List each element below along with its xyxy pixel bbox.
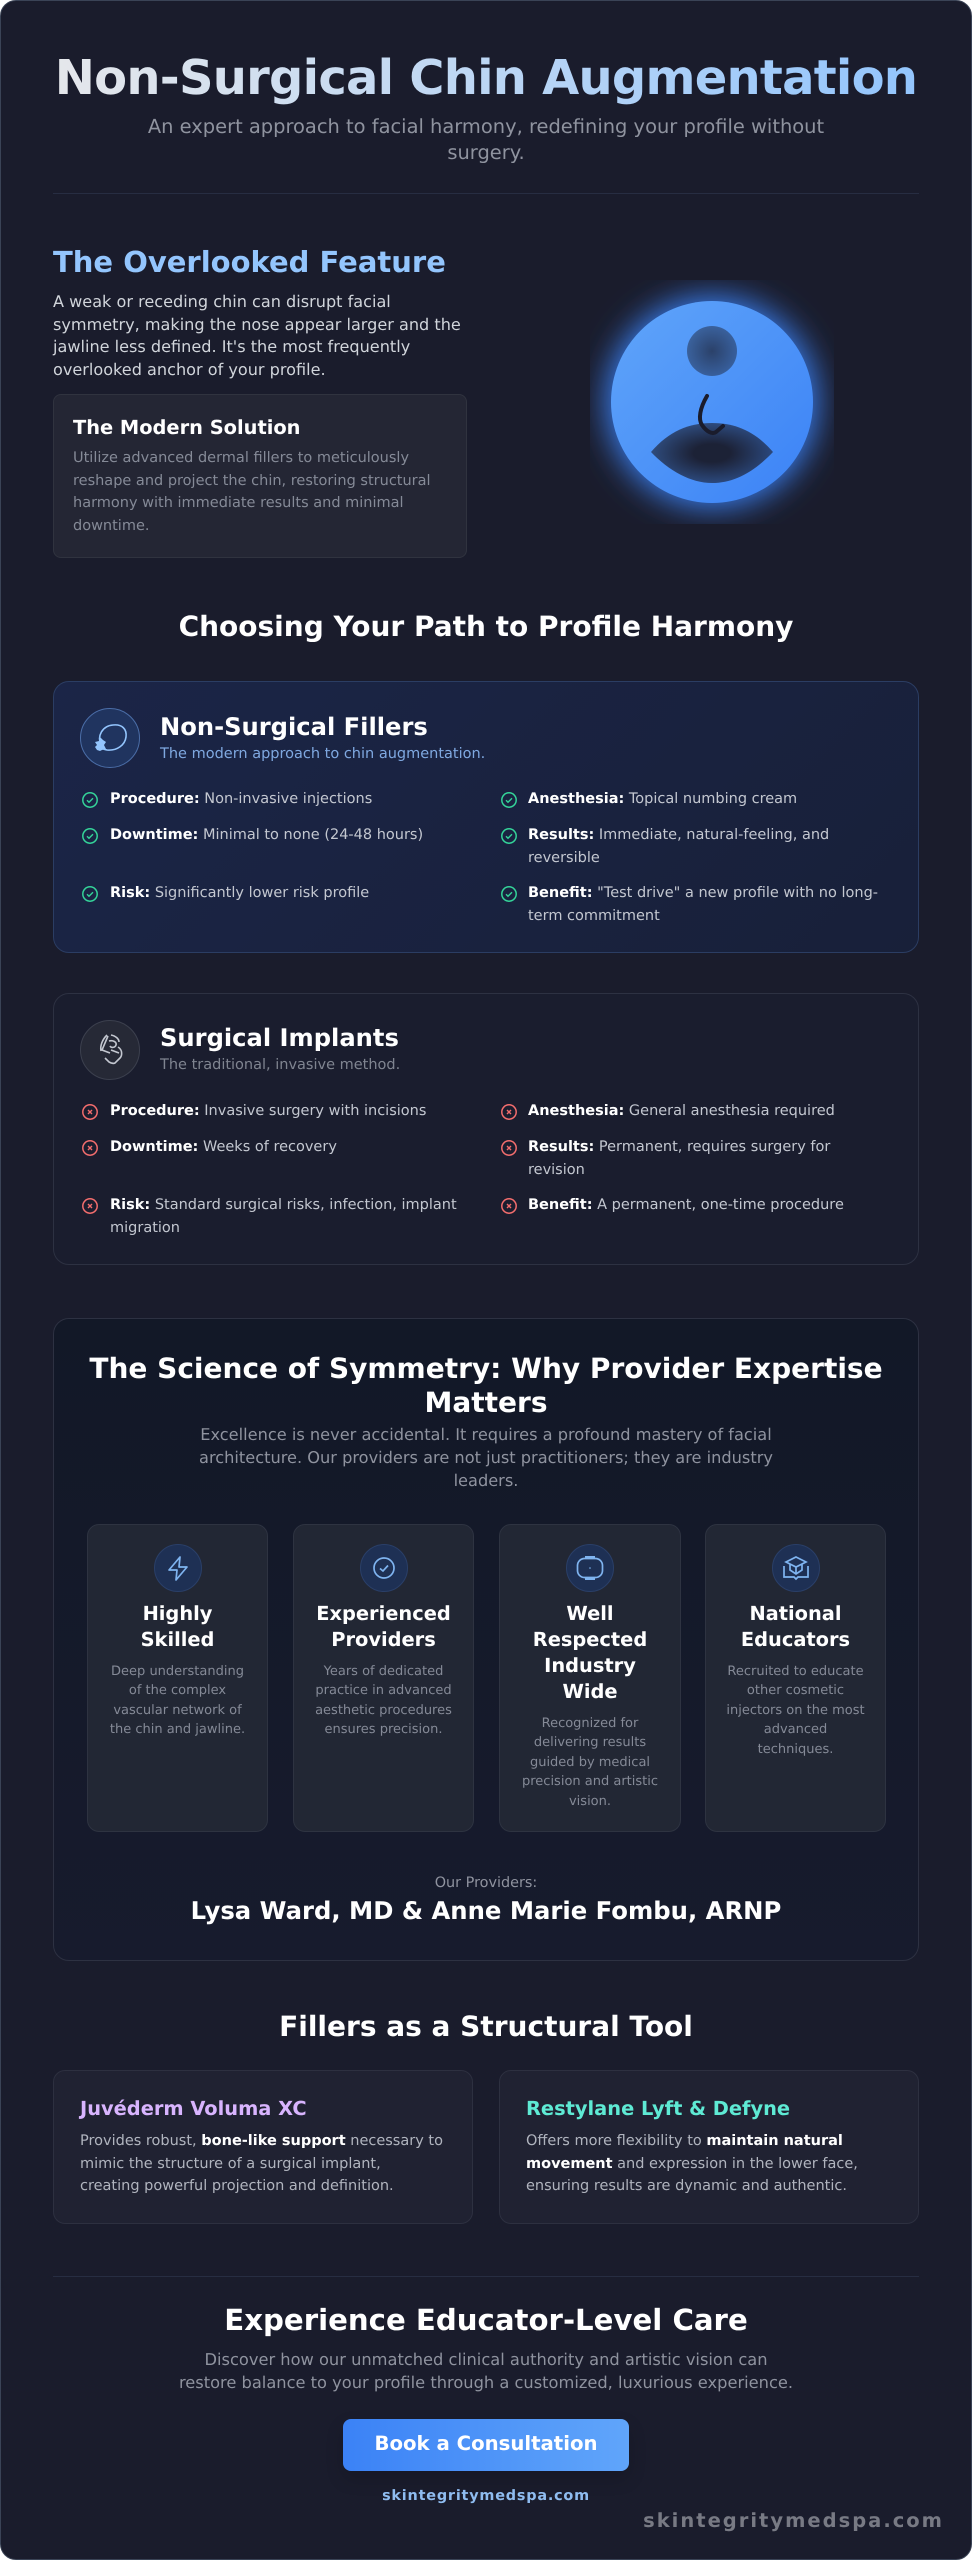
heading: Experienced — [316, 1602, 451, 1625]
heading: science of symmetry: The Science of Symmetry: Why Provider Expertise — [89, 1352, 883, 1385]
item: results — [528, 1139, 830, 1178]
icon: bolt — [154, 1544, 202, 1592]
button: book a consultation — [343, 2419, 629, 2471]
text: restylane body: Offers more flexibility to maintain natural — [526, 2133, 843, 2149]
item: risk: Risk: Significantly lower risk profile — [110, 885, 369, 901]
text: modern solution body: reshape and project the chin, restoring structural — [73, 473, 431, 489]
text: provider names: Lysa Ward, MD & Anne Marie Fombu, ARNP — [191, 1896, 781, 1925]
heading: the overlooked feature: The Overlooked Feature — [53, 245, 446, 279]
text: overlooked feature body: A weak or receding chin can disrupt facial — [53, 292, 391, 311]
text: restylane body: ensuring results are dynamic and authentic. — [526, 2178, 847, 2194]
heading: science of symmetry: Matters — [424, 1386, 548, 1419]
title: Non-Surgical Chin Augmentation — [55, 50, 917, 106]
item: results: revision — [528, 1162, 585, 1178]
text: our providers label: Our Providers: — [435, 1875, 537, 1891]
heading: Highly — [143, 1602, 212, 1625]
text: advanced — [764, 1722, 827, 1737]
heading: fillers as a structural tool: Fillers as a Structural Tool — [279, 2010, 693, 2043]
icon: check — [501, 828, 517, 844]
card: well respected — [499, 1524, 681, 1832]
heading — [706, 1601, 885, 1653]
text: modern solution body: harmony with immediate results and minimal — [73, 495, 404, 511]
icon: check — [501, 886, 517, 902]
text: science intro: leaders. — [454, 1471, 518, 1490]
list: implants left column — [82, 1103, 457, 1236]
heading — [294, 1601, 473, 1653]
text — [294, 1662, 473, 1740]
text: science intro: architecture. Our providers are not just practitioners; they are industry — [199, 1448, 773, 1467]
button: book a consultation: Book a Consultation — [374, 2432, 598, 2455]
heading: modern solution: The Modern Solution — [73, 416, 300, 439]
heading: juvederm: Juvéderm Voluma XC — [80, 2097, 307, 2120]
card: national educators — [705, 1524, 886, 1832]
text: science intro — [199, 1425, 773, 1490]
panel: restylane — [499, 2070, 919, 2224]
watermark: skintegritymedspa.com — [643, 2509, 944, 2532]
panel: juvederm — [53, 2070, 473, 2224]
item: results: Results: Immediate, natural-feeling, and — [528, 827, 829, 843]
text: Recruited to educate — [727, 1664, 864, 1679]
text: restylane body: movement and expression in the lower face, — [526, 2156, 858, 2172]
text: of the complex — [129, 1683, 226, 1698]
item: results: reversible — [528, 850, 600, 866]
item: anesthesia: Anesthesia: Topical numbing cream — [528, 791, 797, 807]
list: fillers right column — [501, 791, 878, 924]
icon: respected — [566, 1544, 614, 1592]
text: the chin and jawline. — [110, 1722, 245, 1737]
text: vision. — [569, 1794, 611, 1809]
text: aesthetic procedures — [315, 1703, 452, 1718]
text: practice in advanced — [315, 1683, 452, 1698]
heading: restylane: Restylane Lyft & Defyne — [526, 2097, 790, 2120]
text: modern solution body — [73, 450, 431, 534]
item: risk — [110, 1197, 457, 1236]
icon: check — [82, 828, 98, 844]
text: ensures precision. — [324, 1722, 442, 1737]
text: guided by medical — [530, 1755, 650, 1770]
subtitle — [148, 115, 824, 164]
icon: face profile — [590, 280, 834, 524]
text: modern solution body: downtime. — [73, 518, 150, 534]
icon: check — [82, 792, 98, 808]
text: science intro: Excellence is never accidental. It requires a profound mastery of facial — [200, 1425, 772, 1444]
panel: the modern solution — [53, 394, 467, 558]
item: results — [528, 827, 829, 866]
item: benefit: Benefit: A permanent, one-time procedure — [528, 1197, 844, 1213]
text: implants subtitle: The traditional, invasive method. — [160, 1057, 400, 1073]
text: Recognized for — [542, 1716, 638, 1731]
item: benefit — [528, 885, 878, 924]
icon: fillers — [80, 708, 140, 768]
text: other cosmetic — [747, 1683, 844, 1698]
text: delivering results — [534, 1735, 646, 1750]
heading: Respected — [533, 1628, 647, 1651]
item: benefit: term commitment — [528, 908, 660, 924]
card: experienced providers — [293, 1524, 474, 1832]
icon: cross — [501, 1198, 517, 1214]
item: anesthesia: Anesthesia: General anesthesia required — [528, 1103, 835, 1119]
text: restylane body — [526, 2130, 858, 2198]
heading: experience educator-level care: Experience Educator-Level Care — [224, 2303, 748, 2337]
icon: cross — [501, 1140, 517, 1156]
text: juvederm body — [80, 2130, 443, 2198]
text: fillers subtitle: The modern approach to chin augmentation. — [160, 746, 485, 762]
list: fillers left column — [82, 791, 423, 902]
icon: check badge — [360, 1544, 408, 1592]
text: precision and artistic — [522, 1774, 658, 1789]
icon: cross — [82, 1198, 98, 1214]
item: risk: Risk: Standard surgical risks, infection, implant — [110, 1197, 457, 1213]
text: vascular network of — [113, 1703, 242, 1718]
icon: cross — [82, 1140, 98, 1156]
text — [706, 1662, 885, 1759]
heading: National — [749, 1602, 842, 1625]
item: procedure: Procedure: Non-invasive injections — [110, 791, 372, 807]
item: downtime: Downtime: Minimal to none (24-48 hours) — [110, 827, 423, 843]
item: benefit: Benefit: "Test drive" a new profile with no long- — [528, 885, 878, 901]
list: implants right column — [501, 1103, 844, 1214]
card: highly skilled — [87, 1524, 268, 1832]
item: results: Results: Permanent, requires surgery for — [528, 1139, 830, 1155]
panel: science of symmetry — [53, 1318, 919, 1961]
text: juvederm body: mimic the structure of a surgical implant, — [80, 2156, 381, 2172]
icon: cross — [82, 1104, 98, 1120]
text: closing — [1, 2348, 971, 2394]
text — [110, 1664, 245, 1737]
text: closing: restore balance to your profile through a customized, luxurious experience. — [179, 2373, 793, 2392]
panel: surgical implants — [53, 993, 919, 1265]
icon: check — [501, 792, 517, 808]
heading: fillers: Non-Surgical Fillers — [160, 713, 428, 741]
icon: check — [82, 886, 98, 902]
heading — [141, 1602, 214, 1651]
text: injectors on the most — [726, 1703, 865, 1718]
subtitle: An expert approach to facial harmony, redefining your profile without — [148, 115, 824, 138]
subtitle: surgery. — [447, 141, 525, 164]
text: modern solution body: Utilize advanced dermal fillers to meticulously — [73, 450, 409, 466]
panel: non-surgical fillers — [53, 681, 919, 953]
heading: science of symmetry — [89, 1352, 883, 1419]
icon: implant — [80, 1020, 140, 1080]
heading: Well — [566, 1602, 614, 1625]
text: overlooked feature body: symmetry, making the nose appear larger and the — [53, 315, 461, 334]
heading: Wide — [562, 1680, 618, 1703]
icon: graduation cap — [772, 1544, 820, 1592]
heading — [500, 1601, 680, 1705]
heading: Educators — [741, 1628, 850, 1651]
heading: implants: Surgical Implants — [160, 1024, 399, 1052]
text: closing: Discover how our unmatched clinical authority and artistic vision can — [204, 2350, 768, 2369]
heading: Providers — [331, 1628, 436, 1651]
text: overlooked feature body — [52, 292, 461, 379]
text: Years of dedicated — [324, 1664, 443, 1679]
text: overlooked feature body: jawline less defined. It's the most frequently — [53, 337, 410, 356]
item: procedure: Procedure: Invasive surgery with incisions — [110, 1103, 426, 1119]
text: Deep understanding — [111, 1664, 244, 1679]
item: downtime: Downtime: Weeks of recovery — [110, 1139, 337, 1155]
link: website: skintegritymedspa.com — [382, 2488, 590, 2504]
text: techniques. — [758, 1742, 833, 1757]
text: juvederm body: Provides robust, bone-like support necessary to — [80, 2133, 443, 2149]
item: risk: migration — [110, 1220, 180, 1236]
heading: choosing your path: Choosing Your Path to Profile Harmony — [179, 610, 793, 643]
icon: cross — [501, 1104, 517, 1120]
text — [500, 1714, 680, 1811]
heading: Skilled — [141, 1628, 214, 1651]
heading: Industry — [544, 1654, 636, 1677]
text: juvederm body: creating powerful projection and definition. — [80, 2178, 394, 2194]
text: overlooked feature body: overlooked anchor of your profile. — [53, 360, 326, 379]
